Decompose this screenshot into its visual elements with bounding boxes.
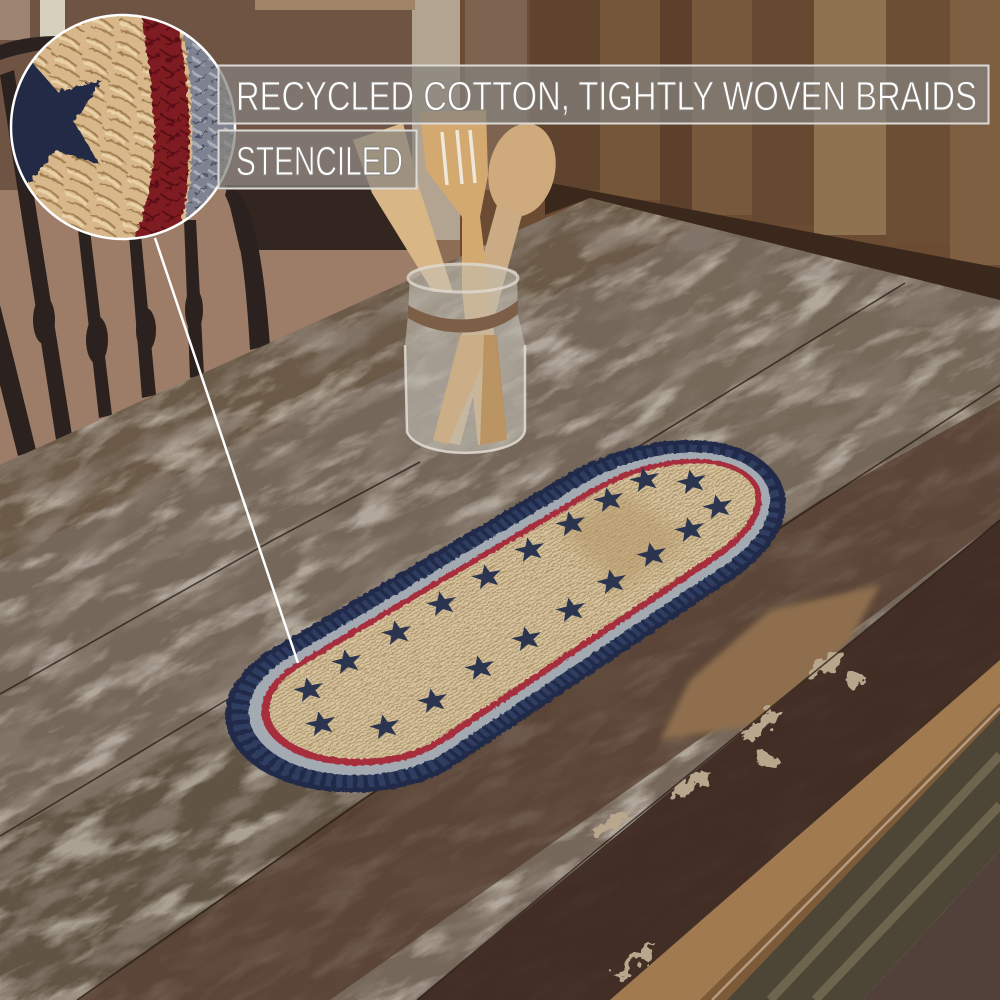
magnified detail circle — [10, 14, 236, 240]
board seams — [0, 283, 1000, 1000]
oval braided runner with stars — [262, 463, 756, 764]
icon: wooden spoon — [433, 117, 564, 445]
runner bands — [262, 463, 756, 764]
icon: slotted spatula — [420, 110, 507, 445]
callout leader line — [155, 238, 298, 663]
runner shaded patch — [560, 490, 690, 590]
brown lower boards — [77, 400, 1000, 1000]
label: stenciled — [218, 130, 416, 188]
paint flecks along seam — [590, 647, 867, 981]
utensils in glass jar — [353, 110, 564, 453]
icon: left spatula — [353, 123, 453, 292]
floor bottom right — [863, 850, 1000, 1000]
wood plank wall — [460, 0, 1000, 305]
label: stenciled: STENCILED — [236, 138, 403, 184]
chair — [0, 36, 270, 456]
magnified star — [12, 63, 102, 184]
icon: mason jar — [405, 264, 525, 453]
stars — [291, 464, 735, 740]
